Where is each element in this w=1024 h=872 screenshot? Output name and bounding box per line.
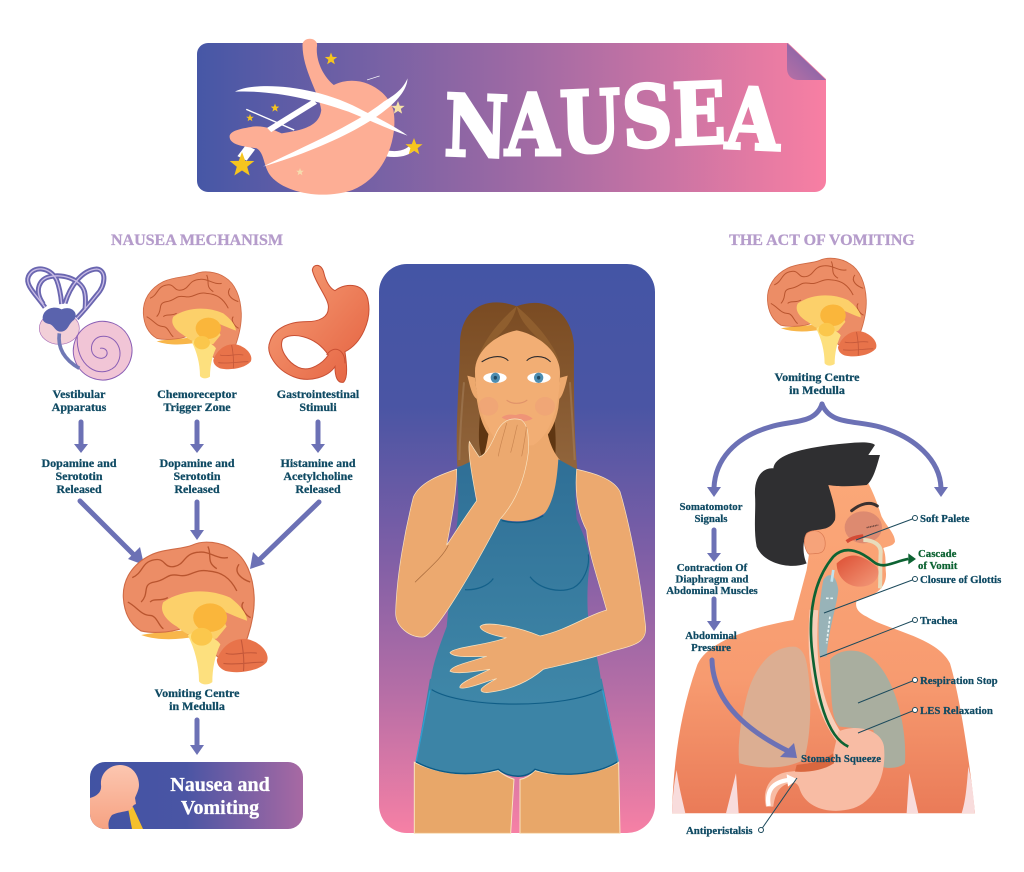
icon: brain (chemoreceptor trigger zone) [143, 272, 251, 378]
callout: closure of glottis [824, 574, 1001, 613]
label: contraction of diaphragm and abdominal muscles: Contraction Of [677, 562, 748, 574]
lungs [739, 647, 810, 767]
mouth cavity [837, 556, 878, 587]
callout: antiperistalsis: Antiperistalsis [686, 825, 753, 837]
callout: cascade of vomit: Cascade [918, 548, 957, 560]
face [467, 376, 568, 453]
label: dopamine and serotonin 2: Serototin [173, 469, 221, 483]
callout: les relaxation: LES Relaxation [920, 705, 993, 717]
label: histamine and acetylcholine: Released [295, 482, 341, 496]
shorts [416, 679, 618, 776]
label: contraction of diaphragm and abdominal muscles: Diaphragm and [676, 574, 748, 586]
nasal cavity [845, 511, 882, 543]
icon: inner ear [28, 269, 140, 388]
icon: brain (vomiting centre) [767, 258, 876, 366]
legs [414, 762, 514, 833]
callout: trachea [820, 615, 958, 657]
callout: les relaxation [858, 705, 993, 733]
callout: trachea: Trachea [920, 615, 958, 627]
antiperistalsis arrow [768, 774, 797, 806]
icon: large brain [123, 542, 268, 684]
panel: the act of vomiting [666, 258, 1001, 837]
label: dopamine and serotonin 2: Dopamine and [159, 456, 235, 470]
label: chemoreceptor trigger zone: Trigger Zone [163, 400, 231, 414]
arrow: center down [190, 502, 204, 540]
label: histamine and acetylcholine: Acetylcholine [283, 469, 353, 483]
callout: respiration stop: Respiration Stop [920, 675, 998, 687]
label: contraction of diaphragm and abdominal muscles: Abdominal Muscles [666, 585, 758, 597]
label: dopamine and serotonin 2: Released [174, 482, 220, 496]
icon: person profile [90, 765, 143, 829]
arrow: to nausea and vomiting [190, 720, 204, 755]
illustration: woman [396, 302, 646, 833]
result box: nausea and vomiting [90, 762, 303, 829]
heading: nausea mechanism: NAUSEA MECHANISM [111, 232, 283, 249]
diaphragm [795, 753, 834, 772]
label: gastrointestinal stimuli: Stimuli [299, 400, 337, 414]
arrow: vestibular down [74, 422, 88, 453]
stomach [765, 728, 884, 811]
icon: stomach [269, 265, 369, 382]
neck and chest [475, 423, 560, 521]
callout: soft palete: Soft Palete [920, 513, 970, 525]
arrow: somatomotor to contraction [707, 530, 721, 562]
ear [804, 531, 825, 554]
illustration: head and torso anatomy [672, 442, 975, 813]
icon: dizzy stomach [230, 39, 423, 195]
label: vestibular apparatus: Vestibular [53, 387, 106, 401]
callout: soft palete [856, 513, 970, 540]
left arm and hand over mouth [396, 419, 528, 637]
eyebrow [852, 503, 877, 511]
label: somatomotor signals: Signals [694, 513, 728, 525]
label: gastrointestinal stimuli: Gastrointestinal [277, 387, 360, 401]
title banner [197, 39, 827, 195]
label: histamine and acetylcholine: Histamine and [280, 456, 356, 470]
arrow: chemoreceptor down [190, 422, 204, 453]
esophagus [813, 610, 847, 747]
arrow: contraction to abdominal pressure [707, 599, 721, 631]
callout: antiperistalsis [686, 778, 797, 837]
label: chemoreceptor trigger zone: Chemoreceptor [157, 387, 238, 401]
text: nausea and vomiting: Vomiting [181, 797, 259, 819]
arrow: branch to somatomotor signals [707, 404, 822, 497]
arrow: gastrointestinal down [311, 422, 325, 453]
label: vomiting centre in medulla: Vomiting Centre [774, 370, 860, 384]
label: vomiting centre in medulla: in Medulla [789, 383, 845, 397]
label: vomiting centre in medulla: in Medulla [169, 699, 225, 713]
label: dopamine and serotonin 1: Serototin [55, 469, 103, 483]
callout: respiration stop [858, 675, 998, 703]
label: dopamine and serotonin 1: Released [56, 482, 102, 496]
heading: the act of vomiting: THE ACT OF VOMITING [729, 232, 915, 249]
label: somatomotor signals: Somatomotor [680, 501, 743, 513]
callout: cascade of vomit: of Vomit [918, 560, 958, 572]
label: abdominal pressure: Abdominal [685, 630, 737, 642]
panel: woman feeling nauseous [379, 264, 655, 833]
right arm and hand on stomach [450, 469, 646, 693]
arrow: branch to soft palate [822, 404, 948, 497]
label: vestibular apparatus: Apparatus [52, 400, 107, 414]
hair [457, 302, 577, 469]
text: nausea and vomiting: Nausea and [170, 774, 270, 796]
vomit path [811, 550, 916, 747]
title text: NAUSEA [443, 64, 783, 178]
label: stomach squeeze: Stomach Squeeze [801, 753, 881, 765]
arrow: diagonal left [80, 501, 144, 565]
tank top [431, 459, 602, 703]
arrow: abdominal pressure to stomach [712, 660, 797, 758]
throat and trachea [819, 575, 838, 657]
torso and neck [672, 475, 975, 813]
panel: nausea mechanism flow [28, 265, 369, 829]
banner page fold [787, 43, 826, 80]
callout: closure of glottis: Closure of Glottis [920, 574, 1001, 586]
label: abdominal pressure: Pressure [691, 642, 731, 654]
arrow: diagonal right [250, 502, 319, 569]
label: dopamine and serotonin 1: Dopamine and [41, 456, 117, 470]
hair [755, 442, 880, 566]
label: vomiting centre in medulla: Vomiting Centre [154, 686, 240, 700]
